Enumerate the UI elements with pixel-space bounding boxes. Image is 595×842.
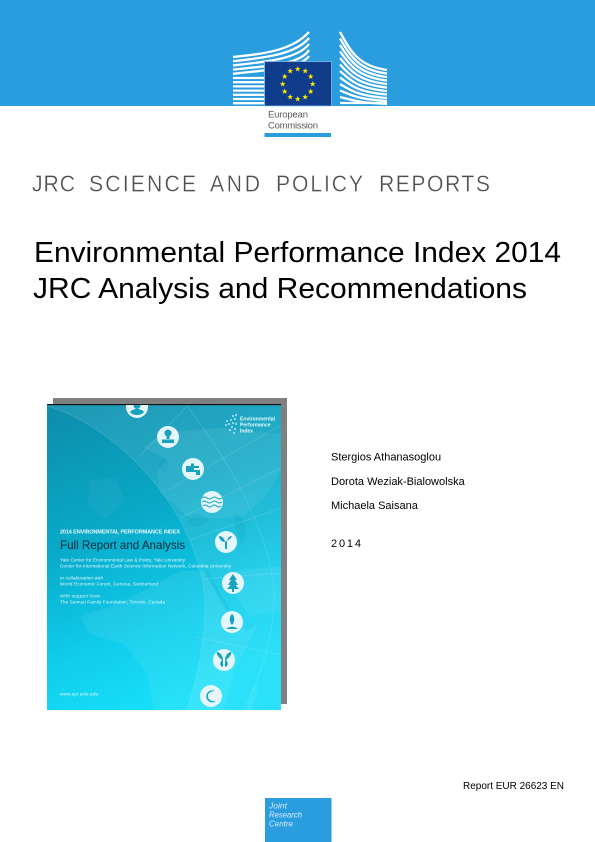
- report number: Report EUR 26623 EN: [463, 781, 564, 792]
- icon: left building: [233, 32, 309, 103]
- series heading: JRC: [32, 170, 75, 197]
- header banner: [0, 0, 595, 106]
- title: [33, 237, 561, 305]
- EPI logo: [225, 414, 276, 434]
- logo wordmark: European: [268, 110, 308, 120]
- series heading: AND: [210, 170, 260, 197]
- cover image: EPI report: [47, 396, 281, 710]
- icon: water waves: [202, 497, 222, 507]
- cover credits: World Economic Forum, Geneva, Switzerland: [60, 582, 158, 586]
- icon: right building: [340, 32, 387, 104]
- icons: circle glyphs: [130, 402, 239, 702]
- European Commission logo: [233, 32, 387, 137]
- cover credits: Yale Center for Environmental Law & Policy, Yale University: [60, 558, 186, 562]
- cover image shadow: [53, 398, 287, 704]
- cover credits: With support from: [60, 594, 100, 598]
- icons: issue circles: [126, 396, 244, 707]
- title: JRC Analysis and Recommendations: [33, 273, 527, 305]
- series heading: POLICY: [276, 170, 363, 197]
- EPI wordmark: Performance: [240, 422, 271, 428]
- JRC logo box: [265, 798, 332, 842]
- series heading: [32, 170, 490, 197]
- icon: EPI dotted mark: [225, 414, 237, 434]
- authors: Stergios Athanasoglou: [331, 452, 441, 464]
- cover credits: The Samuel Family Foundation, Toronto, Canada: [60, 600, 165, 604]
- map: graticule: [47, 406, 281, 710]
- cover heading: [60, 530, 185, 552]
- logo wordmark: Commission: [268, 120, 318, 132]
- cover credits: www.epi.yale.edu: [60, 692, 98, 696]
- logo wordmark: [268, 110, 318, 132]
- title: Environmental Performance Index 2014: [34, 237, 561, 269]
- JRC logo text: Joint: [268, 800, 288, 810]
- map: globe band: [47, 405, 281, 710]
- map: inland seas: [206, 573, 230, 612]
- year: 2 0 1 4: [331, 538, 361, 550]
- series heading: SCIENCE: [89, 170, 196, 197]
- series heading: REPORTS: [379, 170, 490, 197]
- JRC logo text: Centre: [269, 818, 293, 828]
- cover credits: [60, 558, 232, 696]
- EPI wordmark: Environmental: [240, 416, 276, 422]
- authors: [331, 452, 466, 512]
- JRC logo text: Research: [269, 810, 302, 820]
- cover heading: Full Report and Analysis: [60, 538, 185, 552]
- logo underline: [264, 133, 331, 137]
- icon: EU flag: [264, 62, 332, 106]
- cover credits: Center for International Earth Science Information Network, Columbia University: [60, 564, 232, 568]
- cover heading: 2014 ENVIRONMENTAL PERFORMANCE INDEX: [60, 530, 180, 536]
- EPI wordmark: Index: [240, 428, 253, 434]
- map: continents: [80, 428, 281, 710]
- authors: Michaela Saisana: [331, 500, 419, 512]
- cover credits: In collaboration with: [60, 576, 103, 580]
- EPI wordmark: [240, 416, 276, 434]
- JRC logo text: [268, 800, 302, 828]
- authors: Dorota Weziak-Bialowolska: [331, 476, 466, 488]
